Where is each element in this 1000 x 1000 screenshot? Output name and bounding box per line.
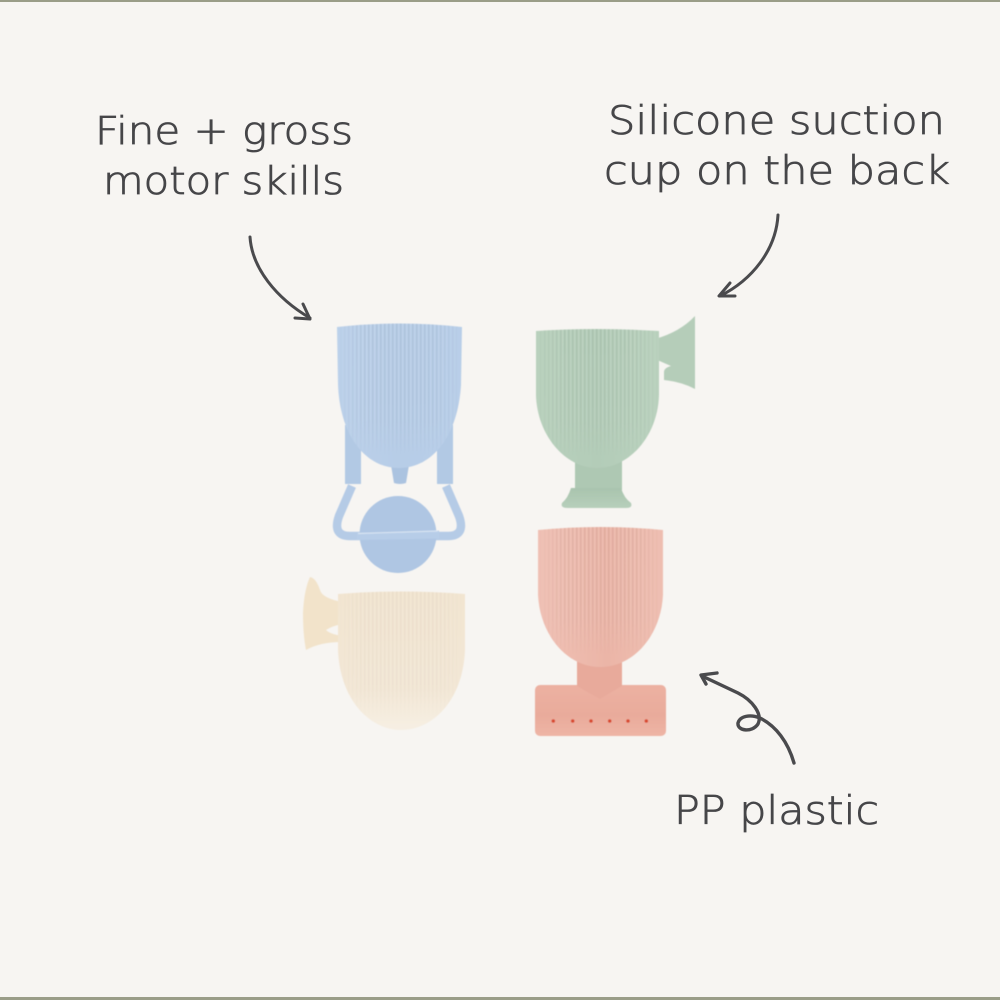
annotation: Fine + gross motor skills xyxy=(95,109,353,203)
annotation: Fine + gross motor skills: motor skills xyxy=(103,159,344,203)
toy: beige cup with suction cup xyxy=(303,577,465,730)
pink stem xyxy=(577,655,622,699)
pink cup body xyxy=(538,527,663,667)
blue legs and wire arms xyxy=(337,425,461,536)
toy: pink cup with sprinkler bar xyxy=(535,527,666,736)
beige suction cup xyxy=(303,577,342,650)
annotation: Silicone suction cup on the back: Silicone suction xyxy=(608,99,945,144)
green cup body xyxy=(536,329,659,468)
arrow: to green suction cup xyxy=(719,215,778,296)
blue spinner disc xyxy=(357,496,439,573)
toy: green cup with suction cup xyxy=(536,316,695,508)
green stem and foot xyxy=(562,455,631,508)
blue cup body xyxy=(337,324,462,468)
arrow: to blue cup xyxy=(250,237,310,319)
green suction cup xyxy=(655,316,695,389)
toy: blue cup with spinner xyxy=(337,324,462,573)
beige cup body xyxy=(338,592,465,730)
annotation: Fine + gross motor skills: Fine + gross xyxy=(95,109,353,153)
arrow: looped, to pink cup xyxy=(701,673,794,763)
spray holes xyxy=(552,719,648,723)
pink sprinkler bar xyxy=(535,685,666,736)
annotation: Silicone suction cup on the back: cup on the back xyxy=(604,149,950,194)
annotation: Silicone suction cup on the back xyxy=(604,99,950,194)
annotation: PP plastic: PP plastic xyxy=(674,789,879,834)
blue nozzle xyxy=(391,465,409,484)
